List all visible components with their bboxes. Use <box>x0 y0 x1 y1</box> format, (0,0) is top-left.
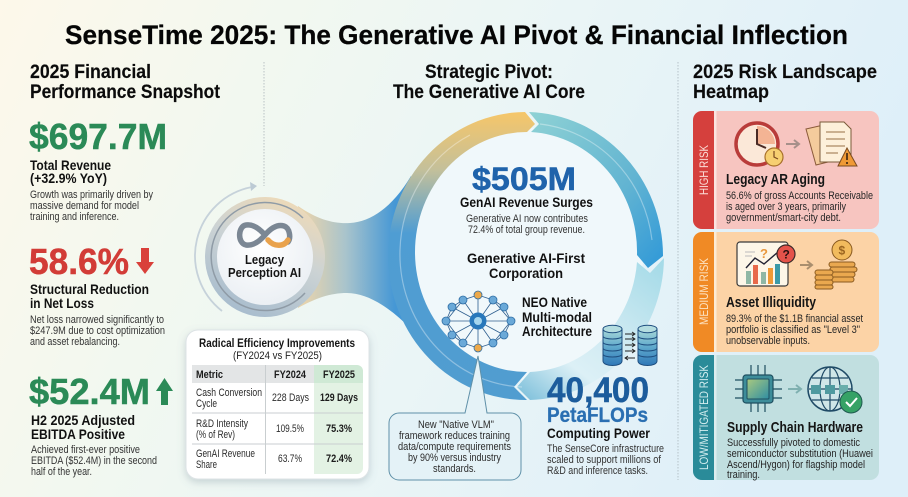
stat: total revenue: massive demand for model <box>30 200 139 212</box>
heading: financial snapshot <box>30 61 220 103</box>
panel: high risk: government/smart-city debt. <box>726 212 841 224</box>
panel: medium risk <box>693 232 879 352</box>
panel: high risk: HIGH RISK <box>697 145 711 195</box>
stat: net loss reduction: in Net Loss <box>30 295 94 311</box>
text: NEO architecture: Multi-modal <box>522 309 592 325</box>
panel: medium risk: Asset Illiquidity <box>726 294 817 311</box>
row: GenAI share: GenAI Revenue <box>196 448 255 460</box>
arrow: orbit <box>195 182 257 311</box>
panel: efficiency table <box>186 330 369 479</box>
stat: GenAI revenue: Generative AI now contributes <box>466 213 588 225</box>
text: NEO architecture: NEO Native <box>522 294 587 310</box>
stat: computing power: 40,400 <box>547 371 649 410</box>
icon: chip to globe <box>735 365 862 413</box>
node: legacy perception AI <box>195 182 325 317</box>
stat: adjusted EBITDA: half of the year. <box>31 466 92 478</box>
row: GenAI share <box>196 448 352 471</box>
row: R&D intensity <box>196 418 352 441</box>
text: generative AI-first <box>467 250 585 281</box>
panel: medium risk: portfolio is classified as "Level 3" <box>726 324 860 336</box>
row: cash conversion: Cycle <box>196 398 217 410</box>
text: NEO architecture: Architecture <box>522 323 592 339</box>
stat: total revenue: training and inference. <box>30 211 119 223</box>
panel: medium risk: 89.3% of the $1.1B financial asset <box>726 313 864 325</box>
icon: infinity <box>240 225 290 245</box>
heading: strategic pivot: The Generative AI Core <box>393 81 585 103</box>
panel: low risk: Successfully pivoted to domestic <box>727 437 860 449</box>
panel: low risk <box>693 355 879 481</box>
stat: net loss reduction: 58.6% <box>29 241 129 282</box>
heading: strategic pivot: Strategic Pivot: <box>425 61 553 83</box>
ring segment: legacy to core <box>388 112 535 400</box>
icon: up arrow <box>156 378 173 405</box>
heading: risk heatmap: Heatmap <box>693 81 769 103</box>
row: GenAI share: 72.4% <box>326 453 352 465</box>
panel: low risk: semiconductor substitution (Huawei <box>727 448 873 460</box>
stat: net loss reduction: Structural Reduction <box>30 281 149 297</box>
icon: databases <box>603 325 657 366</box>
stat: adjusted EBITDA: Achieved first-ever positive <box>31 444 140 456</box>
panel: low risk: LOW/MITIGATED RISK <box>697 365 711 470</box>
stat: adjusted EBITDA: EBITDA ($52.4M) in the second <box>31 455 157 467</box>
panel: low risk: training. <box>727 469 760 481</box>
connector bridge <box>298 176 426 346</box>
row: GenAI share: 63.7% <box>278 453 302 465</box>
row: cash conversion: Cash Conversion <box>196 387 262 399</box>
stat: adjusted EBITDA <box>29 371 173 478</box>
stat: GenAI revenue: GenAI Revenue Surges <box>460 194 593 210</box>
stat: computing power: R&D and inference tasks. <box>547 465 648 477</box>
row: R&D intensity: (% of Rev) <box>196 429 235 441</box>
stat: computing power: The SenseCore infrastructure <box>547 443 664 455</box>
table header: Metric <box>196 369 223 381</box>
text: NEO architecture <box>522 294 592 339</box>
stat: GenAI revenue <box>460 161 593 236</box>
node: legacy perception AI: Legacy <box>245 253 284 267</box>
title: SenseTime 2025: The Generative AI Pivot & Financial Inflection <box>65 20 848 50</box>
callout: native VLM: data/compute requirements <box>398 441 511 453</box>
text: generative AI-first: Generative AI-First <box>467 250 585 266</box>
table header: FY2024 <box>274 369 307 381</box>
panel: high risk: is aged over 3 years, primarily <box>726 201 846 213</box>
table title: Radical Efficiency Improvements <box>199 338 355 350</box>
stat: computing power: PetaFLOPs <box>547 404 648 427</box>
stat: computing power: scaled to support millions of <box>547 454 662 466</box>
callout: native VLM: New "Native VLM" <box>418 419 494 431</box>
row: R&D intensity: 109.5% <box>276 423 304 435</box>
row: GenAI share: Share <box>196 459 217 471</box>
stat: total revenue <box>29 116 167 223</box>
ring segment: light <box>517 258 664 400</box>
stat: computing power: Computing Power <box>547 425 650 441</box>
panel: low risk: Ascend/Hygon) for flagship model <box>727 459 865 471</box>
stat: GenAI revenue: 72.4% of total group revenue. <box>468 224 585 236</box>
stat: total revenue: Total Revenue <box>30 157 111 173</box>
callout: native VLM: by 90% versus industry <box>408 452 501 464</box>
stat: total revenue: $697.7M <box>29 116 167 157</box>
stat: adjusted EBITDA: $52.4M <box>29 371 150 412</box>
heading: financial snapshot: Performance Snapshot <box>30 81 220 103</box>
row: cash conversion <box>196 387 358 410</box>
icon: chart to coins: ? <box>760 246 768 261</box>
table header <box>196 369 355 381</box>
stat: net loss reduction: and asset rebalancing. <box>30 336 120 348</box>
stat: adjusted EBITDA: H2 2025 Adjusted <box>31 412 135 428</box>
icon: chart to coins <box>737 240 857 289</box>
heading: risk heatmap: 2025 Risk Landscape <box>693 61 877 83</box>
table title <box>199 338 355 362</box>
ring segment: teal <box>529 112 663 268</box>
table title: (FY2024 vs FY2025) <box>233 350 322 362</box>
panel: medium risk: MEDIUM RISK <box>697 258 711 325</box>
text: generative AI-first: Corporation <box>489 265 563 281</box>
stat: computing power <box>547 371 664 477</box>
icon: chart to coins: ? <box>782 248 790 262</box>
icon: clock to documents <box>736 122 857 166</box>
row: cash conversion: 228 Days <box>272 392 309 404</box>
icon: chart to coins: $ <box>838 244 846 258</box>
diagram: pivot ring <box>298 112 664 400</box>
node: legacy perception AI: Perception AI <box>228 266 301 280</box>
row: cash conversion: 129 Days <box>320 392 358 404</box>
heading: strategic pivot <box>393 61 585 103</box>
icon: down arrow <box>136 248 154 274</box>
panel: high risk <box>693 111 879 229</box>
stat: total revenue: Growth was primarily driven by <box>30 189 153 201</box>
callout: native VLM <box>389 356 521 480</box>
callout: native VLM: standards. <box>433 463 476 475</box>
stat: net loss reduction: Net loss narrowed significantly to <box>30 314 164 326</box>
callout: native VLM: framework reduces training <box>399 430 510 442</box>
panel: high risk: 56.6% of gross Accounts Receivable <box>726 190 873 202</box>
icon: neural network <box>442 291 515 352</box>
stat: net loss reduction <box>29 241 165 348</box>
panel: high risk: Legacy AR Aging <box>726 171 825 188</box>
panel: financial snapshot <box>29 61 220 478</box>
panel: low risk: Supply Chain Hardware <box>727 419 863 436</box>
stat: GenAI revenue: $505M <box>472 161 576 197</box>
heading: financial snapshot: 2025 Financial <box>30 61 151 83</box>
heading: risk heatmap <box>693 61 877 103</box>
panel: medium risk: unobservable inputs. <box>726 335 810 347</box>
row: R&D intensity: 75.3% <box>326 423 352 435</box>
row: R&D intensity: R&D Intensity <box>196 418 248 430</box>
stat: adjusted EBITDA: EBITDA Positive <box>31 426 125 442</box>
table header: FY2025 <box>323 369 355 381</box>
ring inner disc <box>407 128 643 380</box>
stat: net loss reduction: $247.9M due to cost optimization <box>30 325 165 337</box>
stat: total revenue: (+32.9% YoY) <box>30 170 107 186</box>
